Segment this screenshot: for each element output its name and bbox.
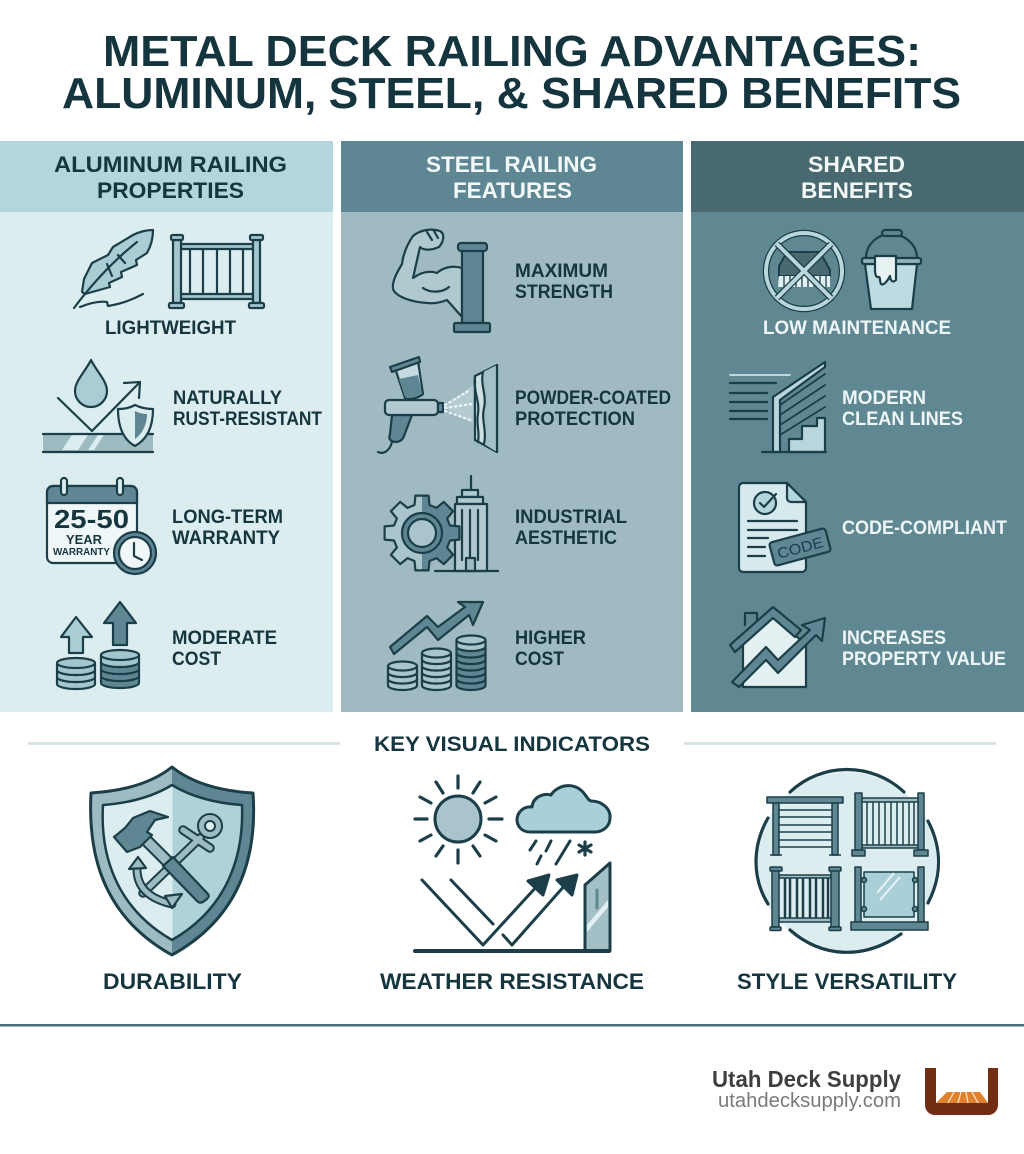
label: increases property value: INCREASES [842, 628, 946, 649]
panel: aluminum railing properties [0, 141, 333, 712]
heading: aluminum [54, 152, 287, 203]
label: maximum strength: MAXIMUM [515, 261, 608, 282]
label: increases property value [842, 628, 1006, 670]
panel: shared benefits [691, 141, 1024, 712]
section heading: key visual indicators: KEY VISUAL INDICATORS [374, 733, 650, 756]
anchor [129, 818, 218, 908]
icon: warranty calendar: WARRANTY [53, 547, 110, 558]
label: powder-coated protection: POWDER-COATED [515, 388, 671, 409]
railing style: glass [851, 867, 928, 930]
label: lightweight: LIGHTWEIGHT [105, 318, 236, 339]
icon: warranty calendar: 25-50 [54, 504, 129, 534]
heading: steel [426, 152, 597, 203]
heading: shared: BENEFITS [801, 178, 913, 203]
footer divider [0, 1024, 1024, 1026]
label: style versatility: STYLE VERSATILITY [737, 969, 957, 994]
title: METAL DECK RAILING ADVANTAGES: [103, 27, 921, 76]
label: powder-coated protection: PROTECTION [515, 409, 635, 430]
railing style: picket [852, 793, 928, 856]
label: industrial aesthetic: INDUSTRIAL [515, 507, 627, 528]
label: moderate cost [172, 628, 277, 670]
label: maximum strength: STRENGTH [515, 282, 613, 303]
footer brand text [712, 1066, 901, 1112]
label: modern clean lines: MODERN [842, 388, 926, 409]
label: code-compliant: CODE-COMPLIANT [842, 518, 1007, 539]
icon: code document: CODE [775, 534, 825, 563]
title [62, 27, 961, 118]
icon: higher cost [388, 602, 486, 690]
label: moderate cost: MODERATE [172, 628, 277, 649]
label: industrial aesthetic: AESTHETIC [515, 528, 617, 549]
label: naturally rust-resistant: RUST-RESISTANT [173, 409, 322, 430]
hammer [114, 811, 209, 903]
label: long-term warranty [172, 507, 283, 549]
label: higher cost: HIGHER [515, 628, 586, 649]
panel: steel railing features [341, 141, 683, 712]
title: ALUMINUM, STEEL, & SHARED BENEFITS [62, 69, 961, 118]
label: higher cost [515, 628, 586, 670]
icon: rust-resistant [43, 360, 153, 452]
label: modern clean lines: CLEAN LINES [842, 409, 963, 430]
heading: aluminum: ALUMINUM RAILING [54, 152, 287, 177]
heading: shared: SHARED [808, 152, 905, 177]
icon: no scrubbing brush [766, 233, 842, 309]
railing style: cable [767, 797, 843, 855]
icon: durability shield [91, 767, 254, 955]
icon: gear and skyscraper [385, 476, 498, 571]
label: powder-coated protection [515, 388, 671, 430]
footer brand text: utahdecksupply.com [718, 1090, 901, 1112]
icon: warranty calendar [47, 478, 156, 574]
icon: weather resistance [415, 776, 610, 951]
heading: steel: STEEL RAILING [426, 152, 597, 177]
icon: warranty calendar: YEAR [66, 532, 103, 547]
label: naturally rust-resistant [173, 388, 322, 430]
heading: steel: FEATURES [453, 178, 572, 203]
icon: spray gun [378, 357, 497, 453]
heading: aluminum: PROPERTIES [97, 178, 244, 203]
footer brand text: Utah Deck Supply [712, 1066, 901, 1092]
label: weather resistance: WEATHER RESISTANCE [380, 969, 644, 994]
icon: strength arm and post [393, 230, 490, 332]
label: maximum strength [515, 261, 613, 303]
heading: shared [801, 152, 913, 203]
icon: style versatility [756, 770, 938, 952]
icon: bucket with cloth [862, 230, 921, 309]
label: modern clean lines [842, 388, 963, 430]
railing style: baluster [770, 867, 841, 930]
icon: house value rising [730, 607, 825, 687]
icon: modern clean lines staircase [730, 362, 826, 452]
label: naturally rust-resistant: NATURALLY [173, 388, 282, 409]
label: industrial aesthetic [515, 507, 627, 549]
label: moderate cost: COST [172, 649, 221, 670]
section heading: key visual indicators [28, 733, 996, 756]
label: long-term warranty: WARRANTY [172, 528, 280, 549]
logo: utah deck supply [925, 1068, 998, 1115]
icon: moderate cost [57, 602, 139, 689]
icon: railing section [169, 235, 264, 308]
label: higher cost: COST [515, 649, 564, 670]
label: increases property value: PROPERTY VALUE [842, 649, 1006, 670]
label: low maintenance: LOW MAINTENANCE [763, 318, 951, 339]
icon: code document [739, 483, 831, 572]
label: long-term warranty: LONG-TERM [172, 507, 283, 528]
label: durability: DURABILITY [103, 969, 242, 994]
icon: feather [74, 230, 153, 308]
